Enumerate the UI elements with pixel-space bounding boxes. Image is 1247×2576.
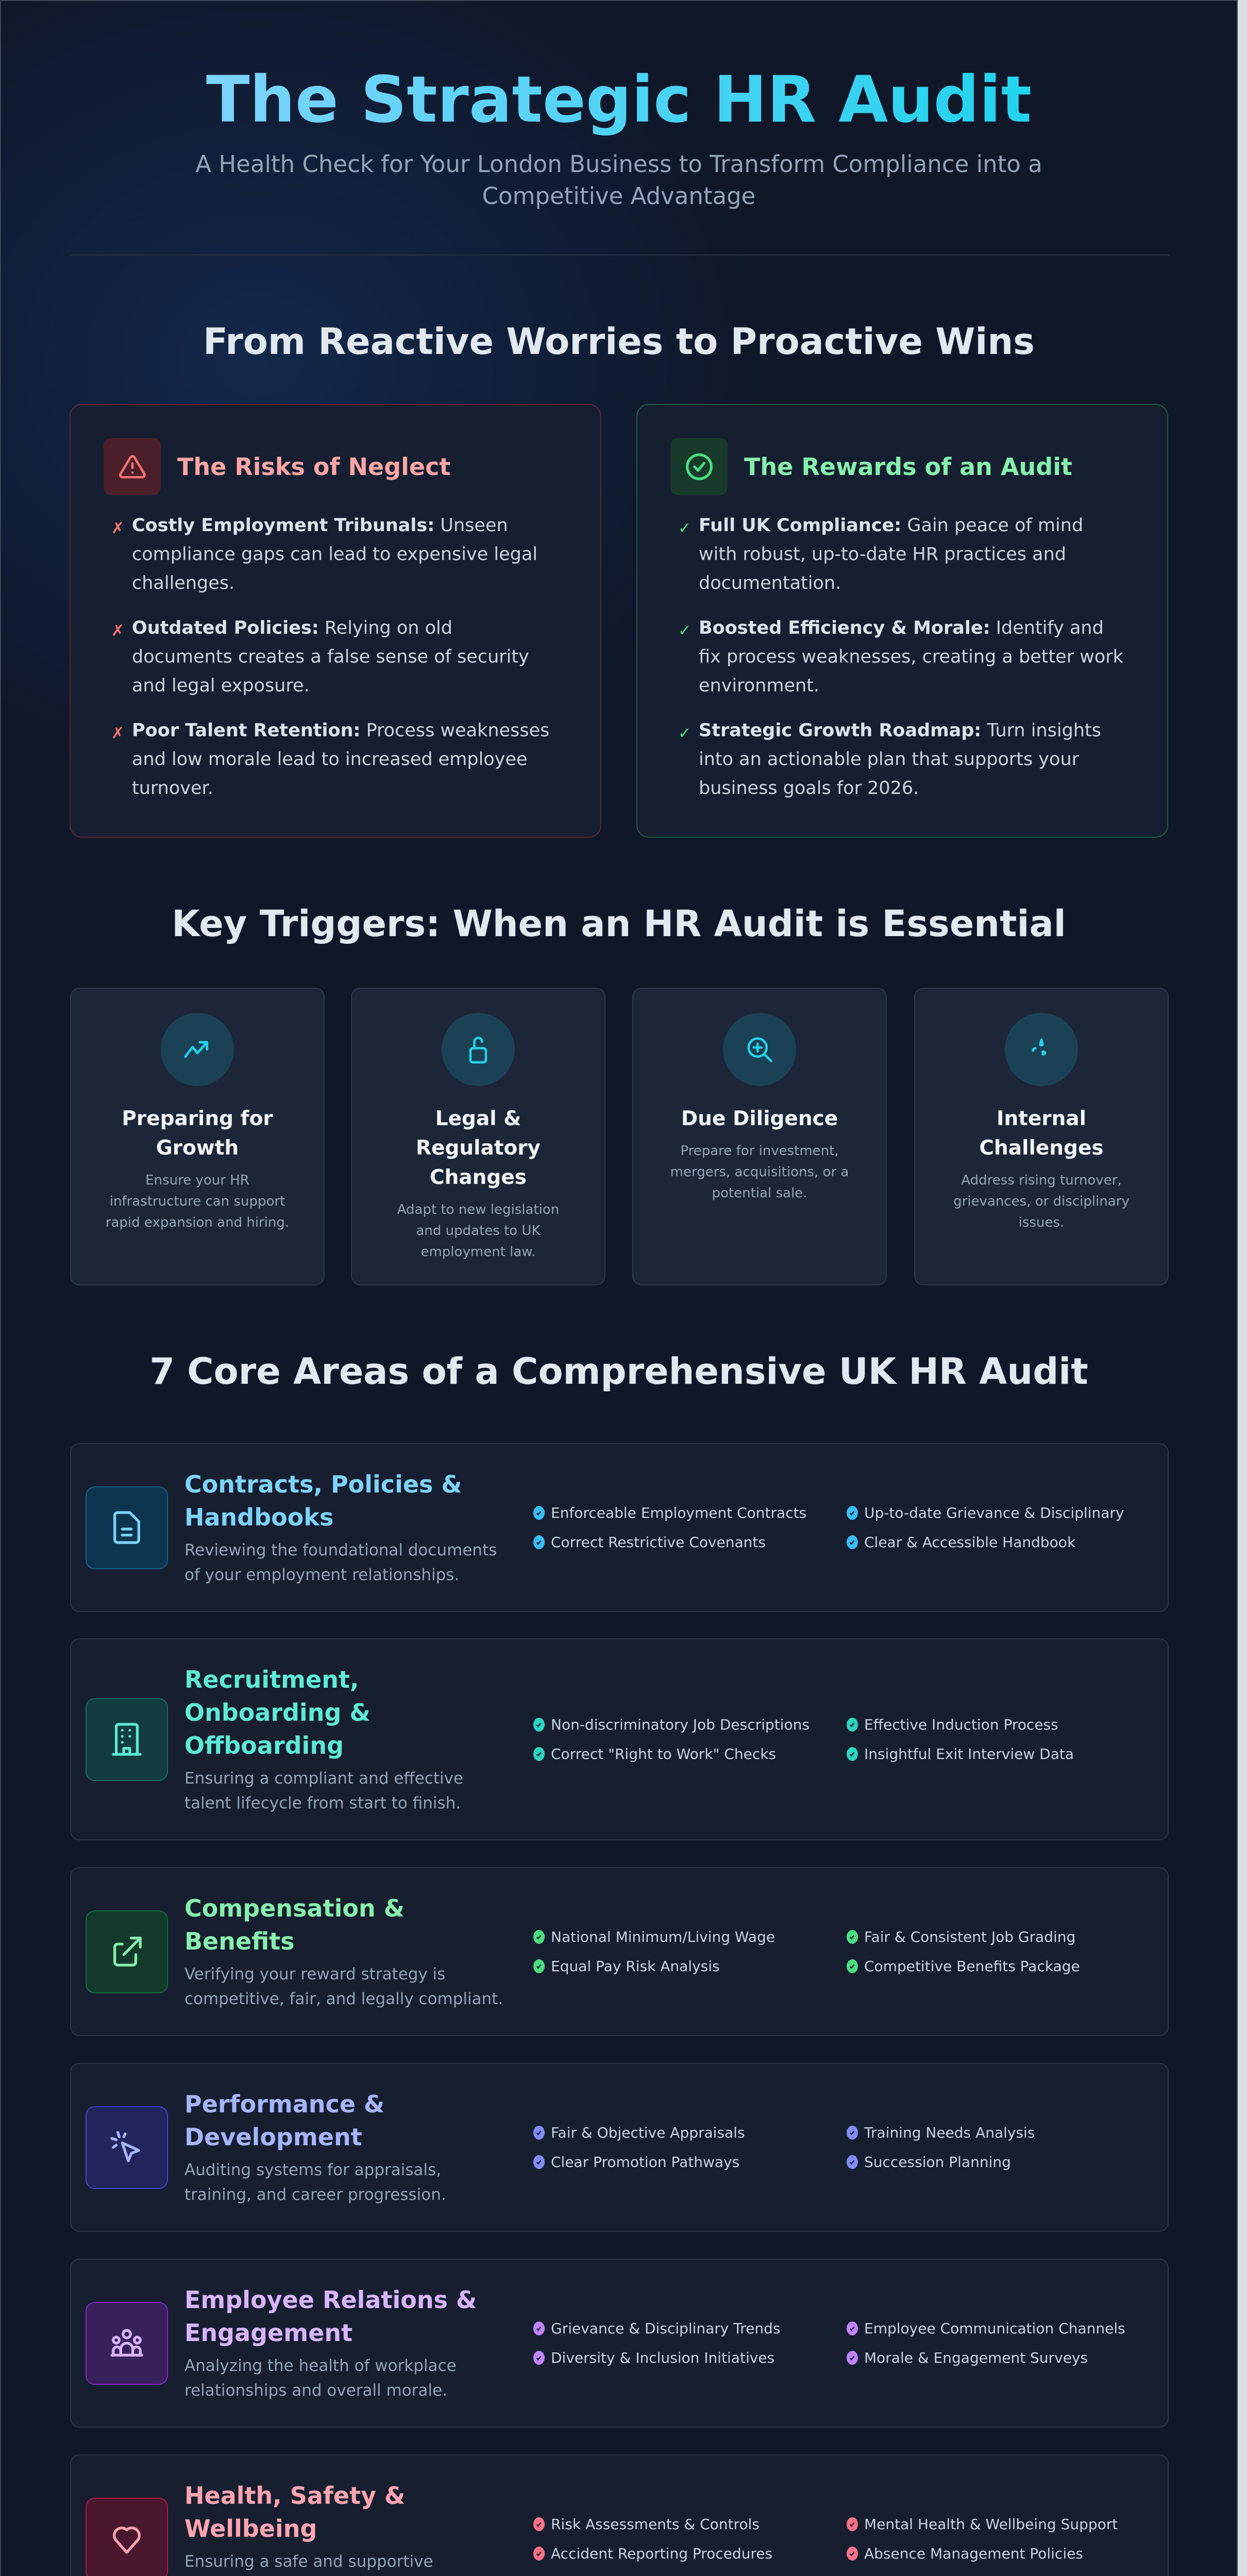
- trigger: preparing for growth: [70, 988, 325, 1285]
- reward item 3: [678, 720, 1101, 799]
- core area 1: contracts: of your employment relationships.: [184, 1566, 459, 1584]
- rewards heading: [670, 438, 1072, 495]
- risk item 3: turnover.: [132, 778, 213, 799]
- core area 6: health & safety: [70, 2454, 1169, 2576]
- core area 1: contracts: [70, 1443, 1169, 1612]
- reward item 1: Full UK Compliance: Gain peace of mind: [699, 515, 1083, 536]
- reward item 1: ✓: [678, 519, 691, 537]
- trigger: internal challenges: Challenges: [979, 1137, 1104, 1160]
- risk item 1: compliance gaps can lead to expensive legal: [132, 544, 537, 565]
- risk item 3: Poor Talent Retention: Process weaknesses: [132, 720, 549, 741]
- reward item 3: into an actionable plan that supports your: [699, 749, 1079, 770]
- icon: file: [86, 1486, 168, 1569]
- checklist: Equal Pay Risk Analysis: [551, 1958, 720, 1974]
- reward item 2: environment.: [699, 675, 819, 696]
- risk item 1: ✗: [111, 519, 124, 537]
- risk item 3: [111, 720, 549, 799]
- title: The Strategic HR Audit: [206, 63, 1032, 137]
- checklist: Diversity & Inclusion Initiatives: [551, 2349, 774, 2366]
- checklist: Fair & Objective Appraisals: [551, 2124, 745, 2141]
- core area 5: employee relations: Engagement: [184, 2319, 352, 2347]
- checklist: [533, 1928, 1080, 1974]
- checklist: Accident Reporting Procedures: [551, 2545, 772, 2562]
- panel: rewards of an audit: [636, 404, 1168, 838]
- checklist: Enforceable Employment Contracts: [551, 1504, 806, 1521]
- checklist: Clear & Accessible Handbook: [864, 1533, 1075, 1551]
- checklist: Non-discriminatory Job Descriptions: [551, 1716, 810, 1733]
- core area 2: recruitment: Offboarding: [184, 1732, 344, 1759]
- core area 3: compensation: [70, 1867, 1169, 2036]
- checklist: [533, 2515, 1118, 2562]
- risk item 1: Costly Employment Tribunals: Unseen: [132, 515, 508, 536]
- checklist: Effective Induction Process: [864, 1716, 1058, 1733]
- core area 6: health & safety: Wellbeing: [184, 2515, 317, 2543]
- trigger: legal changes: [351, 988, 605, 1285]
- core area 5: employee relations: Analyzing the health of workplace: [184, 2357, 457, 2375]
- icon: trending up: [161, 1013, 234, 1086]
- icon: zoom in: [723, 1013, 796, 1086]
- trigger: preparing for growth: rapid expansion and hiring.: [106, 1215, 289, 1230]
- trigger: internal challenges: Internal: [997, 1107, 1086, 1130]
- core area 4: performance: Performance &: [184, 2090, 384, 2118]
- trigger: legal changes: and updates to UK: [416, 1223, 541, 1239]
- core area 4: performance: Auditing systems for appraisals,: [184, 2161, 441, 2179]
- icon: heart: [86, 2498, 168, 2576]
- core area 2: recruitment: Ensuring a compliant and effective: [184, 1769, 463, 1788]
- risk item 1: challenges.: [132, 573, 234, 594]
- core area 2: recruitment: [70, 1638, 1169, 1840]
- checklist: Grievance & Disciplinary Trends: [551, 2319, 780, 2337]
- subtitle: [195, 150, 1042, 210]
- icon: lock: [442, 1013, 515, 1086]
- trigger: due diligence: Prepare for investment,: [680, 1143, 839, 1159]
- reward item 1: documentation.: [699, 573, 841, 594]
- core area 5: employee relations: [70, 2259, 1169, 2428]
- risk item 2: Outdated Policies: Relying on old: [132, 618, 452, 638]
- risk item 2: documents creates a false sense of security: [132, 647, 529, 667]
- checklist: Absence Management Policies: [864, 2545, 1083, 2562]
- core area 3: compensation: Benefits: [184, 1927, 295, 1955]
- core area 2: recruitment: talent lifecycle from start to finish.: [184, 1794, 461, 1812]
- core area 1: contracts: Handbooks: [184, 1503, 333, 1531]
- checklist: [533, 2319, 1125, 2366]
- trigger: legal changes: Adapt to new legislation: [397, 1202, 559, 1217]
- trigger: preparing for growth: Ensure your HR: [145, 1173, 249, 1188]
- core area 1: contracts: Reviewing the foundational documents: [184, 1541, 497, 1560]
- trigger: preparing for growth: Preparing for: [122, 1107, 273, 1130]
- trigger: legal changes: Regulatory: [416, 1137, 541, 1160]
- risks heading: [104, 438, 450, 495]
- risk item 3: ✗: [111, 724, 124, 742]
- checklist: Competitive Benefits Package: [864, 1958, 1080, 1974]
- risk item 2: and legal exposure.: [132, 675, 310, 696]
- reward item 2: fix process weaknesses, creating a better work: [699, 647, 1123, 667]
- trigger: legal changes: Changes: [430, 1166, 527, 1189]
- reward item 1: with robust, up-to-date HR practices and: [699, 544, 1066, 565]
- checklist: Morale & Engagement Surveys: [864, 2349, 1088, 2366]
- reward item 2: [678, 618, 1123, 696]
- checklist: [533, 1504, 1124, 1551]
- panel: risks of neglect: [70, 404, 601, 838]
- risk item 2: ✗: [111, 622, 124, 640]
- heading: 7 core areas: 7 Core Areas of a Comprehensive UK HR Audit: [149, 1350, 1088, 1393]
- trigger: internal challenges: issues.: [1019, 1215, 1064, 1230]
- risk item 2: [111, 618, 529, 696]
- trigger: legal changes: Legal &: [435, 1107, 521, 1130]
- reward item 3: ✓: [678, 724, 691, 742]
- checklist: Risk Assessments & Controls: [551, 2515, 760, 2533]
- checklist: Clear Promotion Pathways: [551, 2154, 739, 2170]
- checklist: Succession Planning: [864, 2154, 1011, 2170]
- core area 3: compensation: Verifying your reward strategy is: [184, 1965, 445, 1984]
- checklist: [533, 2124, 1035, 2170]
- checklist: Correct "Right to Work" Checks: [551, 1745, 776, 1762]
- trigger: due diligence: potential sale.: [712, 1185, 807, 1201]
- icon: pointer click: [86, 2106, 168, 2189]
- checklist: Employee Communication Channels: [864, 2319, 1125, 2337]
- core area 3: compensation: Compensation &: [184, 1894, 405, 1922]
- core area 4: performance: [70, 2063, 1169, 2232]
- core area 5: employee relations: Employee Relations &: [184, 2286, 477, 2314]
- reward item 1: [678, 515, 1083, 594]
- core area 3: compensation: competitive, fair, and legally compliant.: [184, 1990, 503, 2008]
- core area 4: performance: Development: [184, 2123, 362, 2151]
- checklist: Insightful Exit Interview Data: [864, 1745, 1074, 1762]
- core area 2: recruitment: Recruitment,: [184, 1666, 359, 1693]
- checklist: [533, 1716, 1074, 1762]
- checklist: Correct Restrictive Covenants: [551, 1533, 766, 1551]
- trigger: due diligence: mergers, acquisitions, or a: [670, 1164, 849, 1180]
- core area 1: contracts: Contracts, Policies &: [184, 1470, 462, 1498]
- risk item 3: and low morale lead to increased employee: [132, 749, 528, 770]
- icon: building: [86, 1698, 168, 1781]
- core area 4: performance: training, and career progression.: [184, 2185, 446, 2204]
- trigger: preparing for growth: Growth: [156, 1137, 239, 1160]
- heading: from reactive to proactive: From Reactive Worries to Proactive Wins: [203, 320, 1035, 363]
- trigger: internal challenges: grievances, or disciplinary: [953, 1194, 1130, 1209]
- reward item 2: ✓: [678, 622, 691, 640]
- risks heading: The Risks of Neglect: [177, 452, 450, 480]
- trigger: legal changes: employment law.: [421, 1244, 535, 1260]
- core area 5: employee relations: relationships and overall morale.: [184, 2381, 447, 2400]
- subtitle: Competitive Advantage: [482, 182, 755, 210]
- subtitle: A Health Check for Your London Business to Transform Compliance into a: [195, 150, 1042, 178]
- trigger: due diligence: Due Diligence: [681, 1107, 838, 1130]
- risk item 1: [111, 515, 537, 594]
- trigger: preparing for growth: infrastructure can support: [110, 1194, 285, 1209]
- trigger: internal challenges: [914, 988, 1169, 1285]
- icon: droplets: [1005, 1013, 1078, 1086]
- reward item 2: Boosted Efficiency & Morale: Identify and: [699, 618, 1104, 638]
- rewards heading: The Rewards of an Audit: [744, 452, 1072, 480]
- checklist: Up-to-date Grievance & Disciplinary: [864, 1504, 1124, 1521]
- reward item 3: business goals for 2026.: [699, 778, 919, 799]
- icon: users: [86, 2302, 168, 2384]
- heading: key triggers: Key Triggers: When an HR Audit is Essential: [172, 903, 1066, 945]
- core area 2: recruitment: Onboarding &: [184, 1699, 370, 1726]
- core area 6: health & safety: Health, Safety &: [184, 2482, 405, 2510]
- trigger: due diligence: [632, 988, 887, 1285]
- trigger: internal challenges: Address rising turnover,: [961, 1173, 1122, 1188]
- core area 6: health & safety: Ensuring a safe and supportive: [184, 2552, 433, 2571]
- icon: external link: [86, 1910, 168, 1993]
- checklist: Fair & Consistent Job Grading: [864, 1928, 1075, 1945]
- checklist: Mental Health & Wellbeing Support: [864, 2515, 1118, 2533]
- checklist: National Minimum/Living Wage: [551, 1928, 775, 1945]
- reward item 3: Strategic Growth Roadmap: Turn insights: [699, 720, 1101, 741]
- checklist: Training Needs Analysis: [864, 2124, 1035, 2141]
